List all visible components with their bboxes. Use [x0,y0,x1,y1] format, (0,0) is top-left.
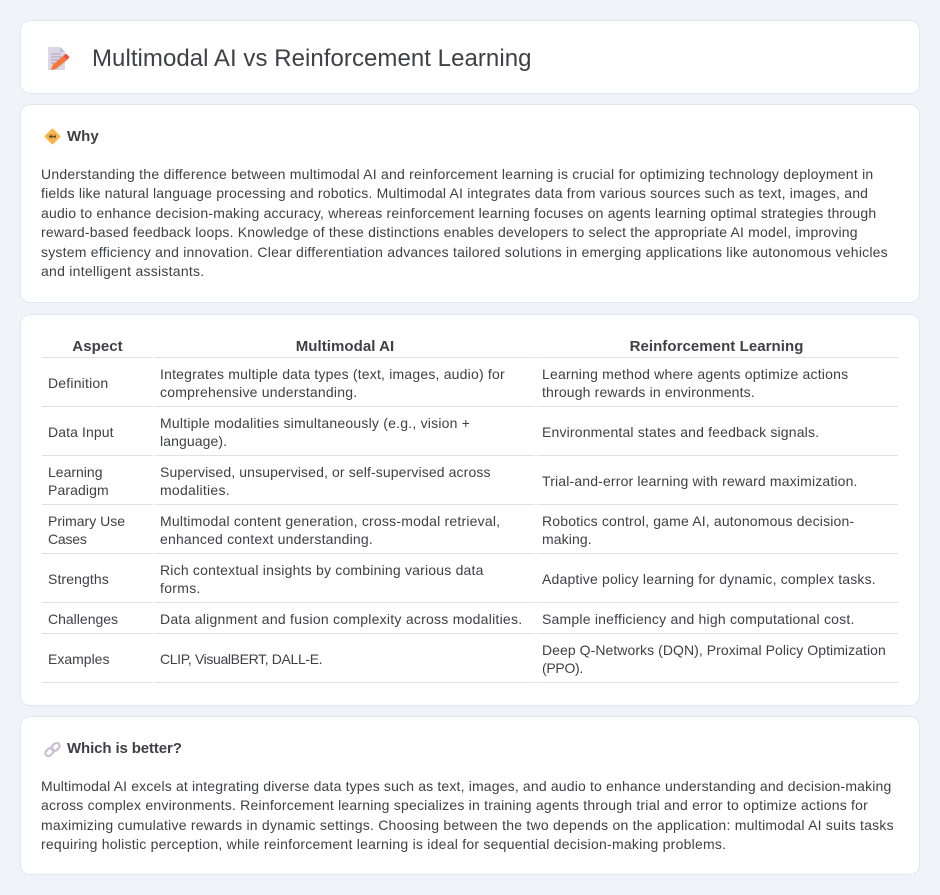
text block: why: Understanding the difference between multimodal AI and reinforcement learning is crucial for optimizing technology deployment in [41,166,873,182]
table header row: Reinforcement Learning [630,338,803,355]
row: primary use cases: enhanced context understanding. [160,531,373,547]
row: challenges: Data alignment and fusion complexity across modalities. [160,611,522,627]
icon: memo with pencil [48,47,70,70]
row: primary use cases: Robotics control, game AI, autonomous decision- [542,513,854,529]
text block: why: and intelligent assistants. [41,263,204,279]
text block: which is better: requiring holistic perception, while reinforcement learning is ideal for sequential decision-making problems. [41,836,726,852]
text block: which is better: Multimodal AI excels at integrating diverse data types such as text, images, and audio to enhance understanding and decision-making [41,778,891,794]
table header row: Aspect [72,338,123,355]
row: primary use cases [48,513,854,547]
text block: why [41,166,888,279]
row: data input: language). [160,433,227,449]
row: definition: comprehensive understanding. [160,384,357,400]
panel: title header [20,20,920,94]
text block: which is better [41,778,894,852]
row: definition: Integrates multiple data types (text, images, audio) for [160,366,505,382]
text block: which is better: across complex environments. Reinforcement learning specializes in training agents through trial and error to optimize actions for [41,797,868,813]
icon: link [44,742,61,758]
row: data input: Environmental states and feedback signals. [542,424,819,440]
text block: which is better: maximizing cumulative rewards in dynamic settings. Choosing between the two depends on the application: multimodal AI suits tasks [41,817,894,833]
row: definition: Learning method where agents optimize actions [542,366,848,382]
table header row [72,338,803,355]
panel: which is better [20,716,920,875]
icon: warning diamond [44,128,60,144]
row: learning paradigm: Paradigm [48,482,109,498]
row: definition [48,366,848,400]
row: strengths [48,562,876,596]
panel: why [20,104,920,303]
row: examples: (PPO). [542,660,583,676]
row: learning paradigm: Trial-and-error learning with reward maximization. [542,473,858,489]
row: examples: CLIP, VisualBERT, DALL-E. [160,651,322,667]
row: examples [48,642,886,676]
row: examples: Deep Q-Networks (DQN), Proximal Policy Optimization [542,642,886,658]
comparison table [42,338,898,683]
table header row: Multimodal AI [296,338,394,355]
row: data input: Multiple modalities simultaneously (e.g., vision + [160,415,470,431]
row: definition: Definition [48,375,108,391]
row: challenges: Sample inefficiency and high computational cost. [542,611,855,627]
text block: why: audio to enhance decision-making accuracy, whereas reinforcement learning focuses on agents learning optimal strategies through [41,205,876,221]
title: Multimodal AI vs Reinforcement Learning [92,45,532,72]
row: data input: Data Input [48,424,114,440]
row: challenges: Challenges [48,611,118,627]
row: primary use cases: making. [542,531,592,547]
heading: why: Why [67,128,99,145]
row: strengths: Adaptive policy learning for dynamic, complex tasks. [542,571,876,587]
row: primary use cases: Cases [48,531,87,547]
row: primary use cases: Primary Use [48,513,125,529]
row: challenges [48,611,855,627]
text block: why: reward-based feedback loops. Knowledge of these distinctions enables developers to select the appropriate AI model, improving [41,224,858,240]
row: learning paradigm: Supervised, unsupervised, or self-supervised across [160,464,491,480]
heading: which is better: Which is better? [67,740,182,757]
panel: comparison table [20,314,920,706]
row: data input [48,415,819,449]
row: definition: through rewards in environments. [542,384,755,400]
text block: why: system efficiency and innovation. Clear differentiation advances tailored solutions in emerging applications like autonomous vehicles [41,244,888,260]
row: primary use cases: Multimodal content generation, cross-modal retrieval, [160,513,500,529]
row: strengths: Strengths [48,571,109,587]
row: learning paradigm [48,464,858,498]
row: learning paradigm: modalities. [160,482,230,498]
row: strengths: forms. [160,580,201,596]
row: learning paradigm: Learning [48,464,102,480]
text block: why: fields like natural language processing and robotics. Multimodal AI integrates data from various sources such as text, images, and [41,185,868,201]
row: examples: Examples [48,651,109,667]
row: strengths: Rich contextual insights by combining various data [160,562,484,578]
